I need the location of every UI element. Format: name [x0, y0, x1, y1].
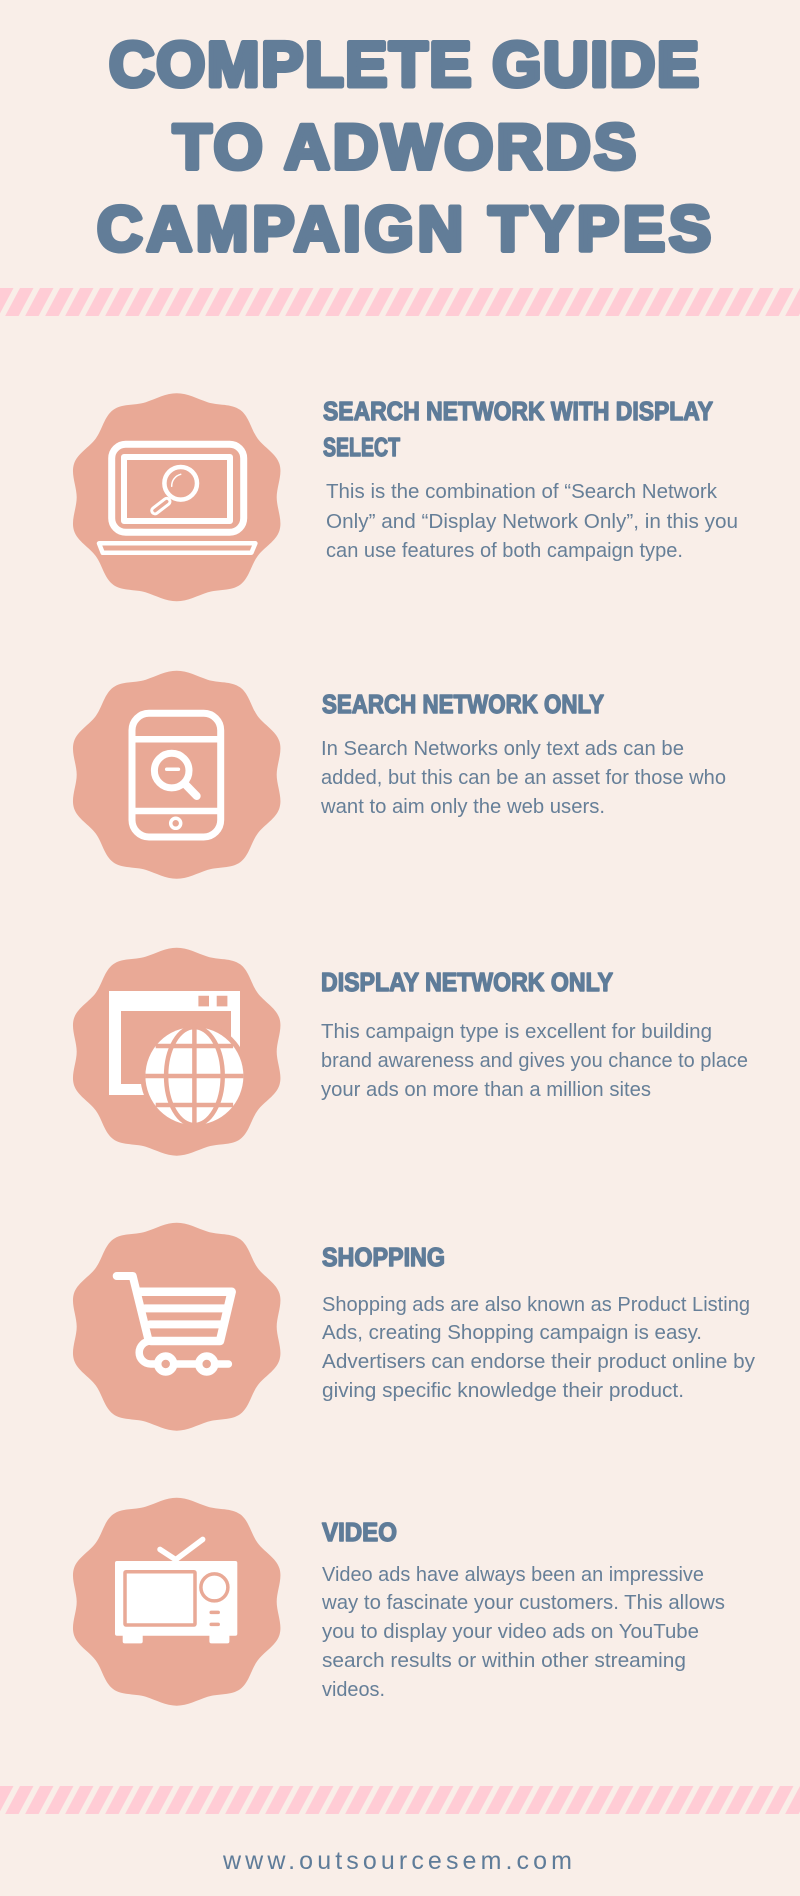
text block: In Search Networks only text ads can be — [321, 737, 684, 760]
heading — [323, 398, 713, 462]
heading: VIDEO — [322, 1519, 397, 1547]
heading: DISPLAY NETWORK ONLY — [321, 969, 613, 997]
text block: search results or within other streaming — [322, 1649, 686, 1672]
title: COMPLETE GUIDE — [109, 30, 699, 100]
text block — [321, 1020, 748, 1101]
text block: way to fascinate your customers. This allows — [321, 1591, 725, 1614]
text block — [321, 1563, 725, 1701]
heading: SEARCH NETWORK WITH DISPLAY — [323, 398, 713, 426]
icon: phone with magnifier — [73, 671, 280, 879]
text block — [326, 480, 738, 562]
panel: search network with display select — [73, 393, 738, 601]
text block: can use features of both campaign type. — [326, 539, 683, 562]
text block: This is the combination of “Search Network — [326, 480, 718, 503]
title: TO ADWORDS — [173, 112, 636, 182]
text block: giving specific knowledge their product. — [322, 1379, 684, 1402]
text block — [322, 1293, 756, 1402]
text block: Ads, creating Shopping campaign is easy. — [322, 1321, 702, 1344]
heading: SEARCH NETWORK ONLY — [322, 691, 604, 719]
panel: video — [73, 1498, 725, 1706]
panel: shopping — [73, 1223, 756, 1431]
panel: search network only — [73, 671, 726, 879]
text block: your ads on more than a million sites — [321, 1078, 651, 1101]
bottom striped band — [0, 1786, 800, 1814]
footer url: www.outsourcesem.com — [222, 1847, 572, 1875]
title: CAMPAIGN TYPES — [97, 194, 711, 264]
panel: display network only — [73, 948, 748, 1156]
text block: Advertisers can endorse their product online by — [322, 1350, 756, 1373]
title — [97, 30, 711, 264]
icon: laptop with magnifier — [73, 393, 280, 601]
heading: SHOPPING — [322, 1244, 445, 1272]
heading: SELECT — [323, 434, 400, 462]
icon: shopping cart — [73, 1223, 280, 1431]
text block: you to display your video ads on YouTube — [322, 1620, 699, 1643]
top striped band — [0, 288, 800, 316]
text block: want to aim only the web users. — [320, 795, 605, 818]
text block: This campaign type is excellent for building — [321, 1020, 712, 1043]
icon: television — [73, 1498, 280, 1706]
text block: added, but this can be an asset for those who — [321, 766, 726, 789]
text block: videos. — [322, 1678, 385, 1701]
text block: Shopping ads are also known as Product Listing — [322, 1293, 750, 1316]
text block: Video ads have always been an impressive — [322, 1563, 704, 1586]
text block: brand awareness and gives you chance to place — [321, 1049, 748, 1072]
text block: Only” and “Display Network Only”, in this you — [326, 510, 738, 533]
text block — [320, 737, 726, 818]
icon: browser window with globe — [73, 948, 280, 1156]
